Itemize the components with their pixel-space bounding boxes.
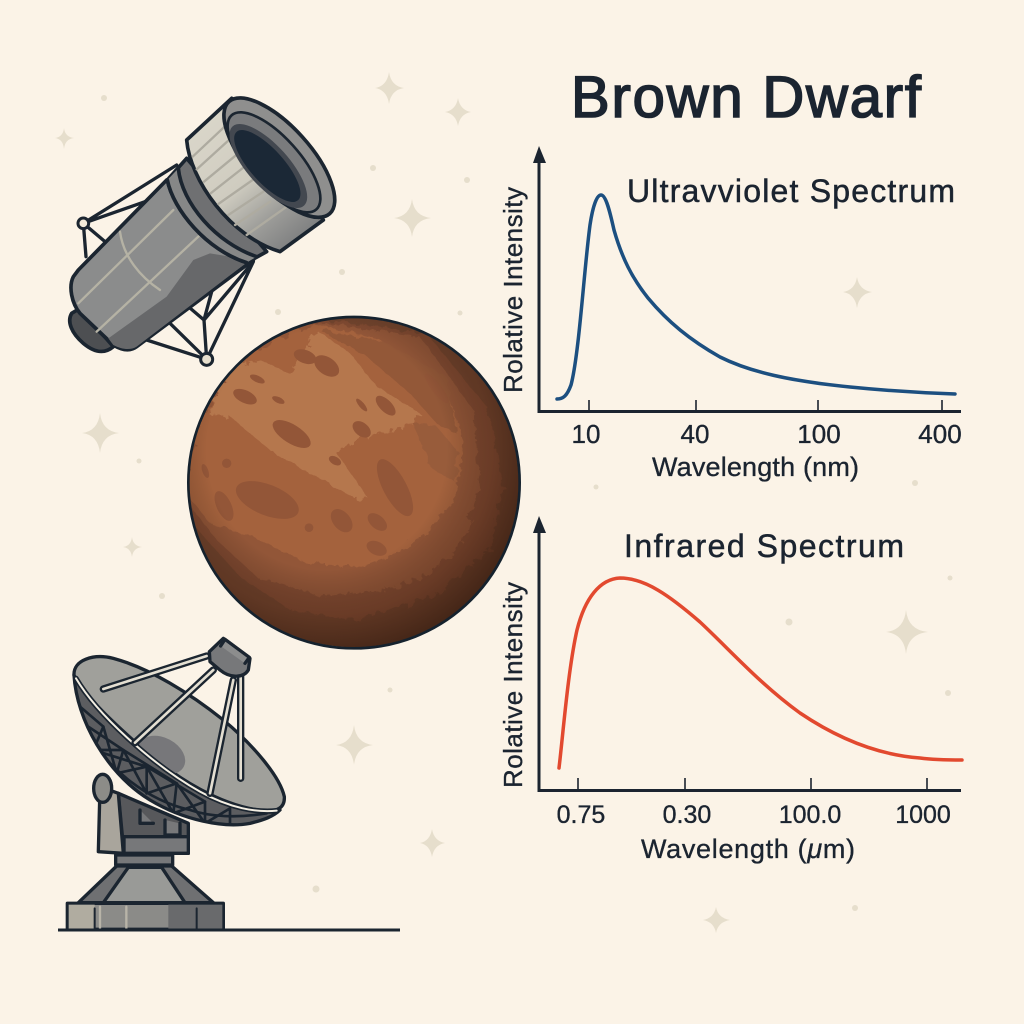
uv axes — [533, 146, 961, 412]
ir x label: Wavelength (μm) — [641, 834, 855, 864]
chart: ultraviolet spectrum — [498, 146, 962, 482]
dish struts — [103, 656, 241, 793]
ground line — [58, 928, 400, 932]
decorative stars — [55, 72, 952, 933]
uv tick labels: 400 — [918, 419, 962, 449]
dish back lattice — [74, 675, 280, 825]
uv tick labels: 100 — [797, 419, 841, 449]
ir tick labels: 1000 — [895, 801, 951, 829]
chart: infrared spectrum — [498, 516, 962, 864]
uv y label: Rolative Intensity — [498, 187, 528, 393]
ir tick labels: 0.30 — [663, 801, 711, 829]
uv tick labels: 40 — [681, 419, 709, 449]
uv tick labels — [572, 419, 962, 449]
planet terminator shading — [190, 318, 518, 647]
ir axes — [533, 516, 961, 790]
ir tick labels: 100.0 — [779, 801, 841, 829]
ir tick labels — [557, 801, 951, 829]
planet: brown dwarf — [180, 310, 530, 660]
telescope nodes — [78, 218, 89, 229]
dish reflector face — [74, 657, 284, 811]
dish mount — [118, 793, 188, 853]
ir curve — [559, 578, 962, 768]
planet surface bands — [180, 313, 503, 620]
dish rim — [76, 678, 277, 811]
telescope truss — [83, 165, 253, 359]
dish feed horn — [209, 638, 250, 676]
uv curve — [557, 195, 955, 399]
ir y label: Rolative Intensity — [498, 582, 528, 788]
dish pedestal base — [67, 903, 223, 929]
planet spots — [200, 346, 452, 559]
icon: radio dish antenna — [67, 638, 284, 929]
telescope end cap — [70, 308, 113, 351]
telescope hood — [187, 98, 323, 252]
dish pedestal cone — [78, 866, 213, 903]
icon: space telescope — [70, 81, 353, 365]
ir tick labels: 0.75 — [557, 801, 605, 829]
ir title: Infrared Spectrum — [624, 528, 904, 564]
uv x label: Wavelength (nm) — [652, 452, 859, 482]
telescope aperture — [206, 81, 353, 234]
uv tick labels: 10 — [572, 419, 600, 449]
title: Brown Dwarf — [571, 65, 922, 130]
uv title: Ultravviolet Spectrum — [627, 173, 955, 209]
telescope body — [71, 180, 253, 350]
telescope collar — [167, 158, 267, 263]
